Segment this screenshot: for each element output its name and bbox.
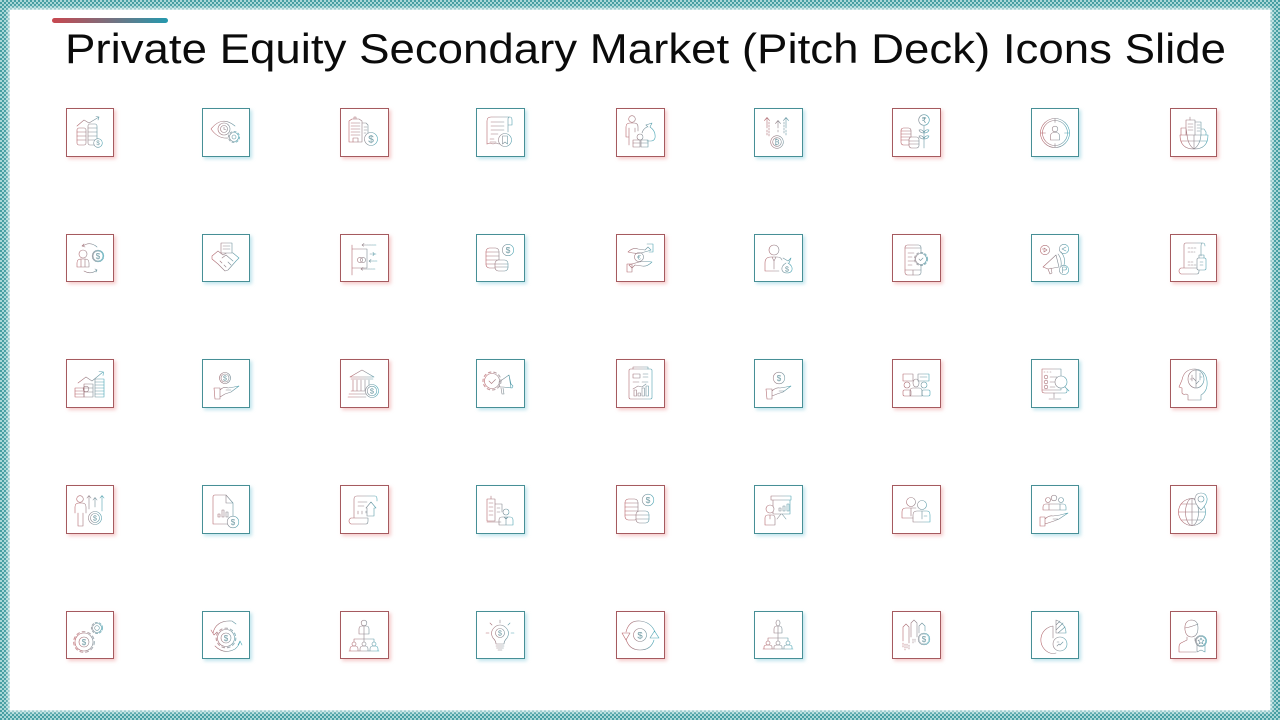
icon: document with chart and coin [202, 486, 252, 536]
icon: coins with growth chart [66, 108, 116, 159]
icon: pie chart with coin [1032, 612, 1081, 661]
icon: presenter with board [754, 486, 805, 536]
icon: document with chart and coin: $ [231, 518, 236, 527]
title: Private Equity Secondary Market (Pitch Deck) Icons Slide [65, 25, 1226, 72]
icon: target with person [1032, 108, 1081, 159]
icon: light bulb with dollar [476, 612, 527, 661]
icon: org chart [754, 612, 805, 661]
icon: building with businessman [476, 486, 527, 536]
icon: person with arrows and coin: $ [93, 516, 97, 522]
icon: office building with coin: $ [368, 134, 374, 146]
icon: buildings on globe [1170, 108, 1219, 159]
icon: bank with coin: $ [370, 386, 375, 396]
icon: bank with coin [340, 360, 391, 410]
icon: hands exchanging euro [616, 234, 667, 284]
icon: coin stacks with dollar: $ [506, 245, 511, 255]
icon: phone with gear [892, 234, 943, 284]
icon: gear cycle with dollar [202, 612, 252, 661]
icon: handshake with document [202, 234, 252, 284]
icon: certificate with bookmark [476, 108, 527, 159]
icon: person with arrows and coin [66, 486, 116, 536]
icon: globe with pin [1170, 486, 1219, 536]
icon: coin stacks with dollar [476, 234, 527, 284]
icon: gear cycle with dollar: $ [224, 634, 229, 643]
icon: gear with megaphone [476, 360, 527, 410]
icon: scroll with jar [1170, 234, 1219, 284]
icon: rising arrows with coin: $ [922, 635, 927, 644]
icon: coins with rupee plant: ₹ [921, 116, 927, 125]
icon: gears with dollar: $ [82, 638, 87, 647]
icon: dollar cycle with triangles [616, 612, 667, 661]
icon: office building with coin [340, 108, 391, 159]
icon: hand holding team [1032, 486, 1081, 536]
icon: two businessmen [892, 486, 943, 536]
icon: scroll with house [340, 486, 391, 536]
icon: org chart [340, 612, 391, 661]
icon: rising arrows and bitcoin [754, 108, 805, 159]
accent bar [52, 18, 168, 23]
icon: clipboard with chart [616, 360, 667, 410]
icon: businessman with money bag [754, 234, 805, 284]
icon: hand holding dollar coin [754, 360, 805, 410]
icon: megaphone with share and play [1032, 234, 1081, 284]
icon: hands exchanging euro: € [637, 254, 641, 262]
icon: hand holding coin: $ [223, 376, 227, 382]
icon: head with brain [1170, 360, 1219, 410]
icon: coins with growth chart: $ [96, 141, 100, 147]
icon: team with boards [892, 360, 943, 410]
icon: hand holding dollar coin: $ [777, 374, 782, 383]
icon: man with money bag and coins [616, 108, 667, 159]
icon: coins with rupee plant [892, 108, 943, 159]
icon: card with arrows [340, 234, 391, 284]
icon: gears with dollar [66, 612, 116, 661]
icon: light bulb with dollar: $ [498, 630, 502, 638]
icon: dollar cycle with triangles: $ [637, 630, 643, 642]
icon: coin stacks with dollar [616, 486, 667, 536]
icon: person with award badge [1170, 612, 1219, 661]
icon: monitor with magnifier [1032, 360, 1081, 410]
icon: businessman with money bag: $ [785, 266, 789, 274]
icon: hand holding coin [202, 360, 252, 410]
icon: rising arrows with coin [892, 612, 943, 661]
icon: coin stacks with dollar: $ [646, 495, 651, 505]
icon: eye with gear [202, 108, 252, 159]
icon: rising arrows and bitcoin: ₿ [774, 138, 780, 146]
icon: growth stacks and arrow [66, 360, 116, 410]
icon: person and coin cycle: $ [96, 252, 101, 261]
icon: person and coin cycle [66, 234, 116, 284]
